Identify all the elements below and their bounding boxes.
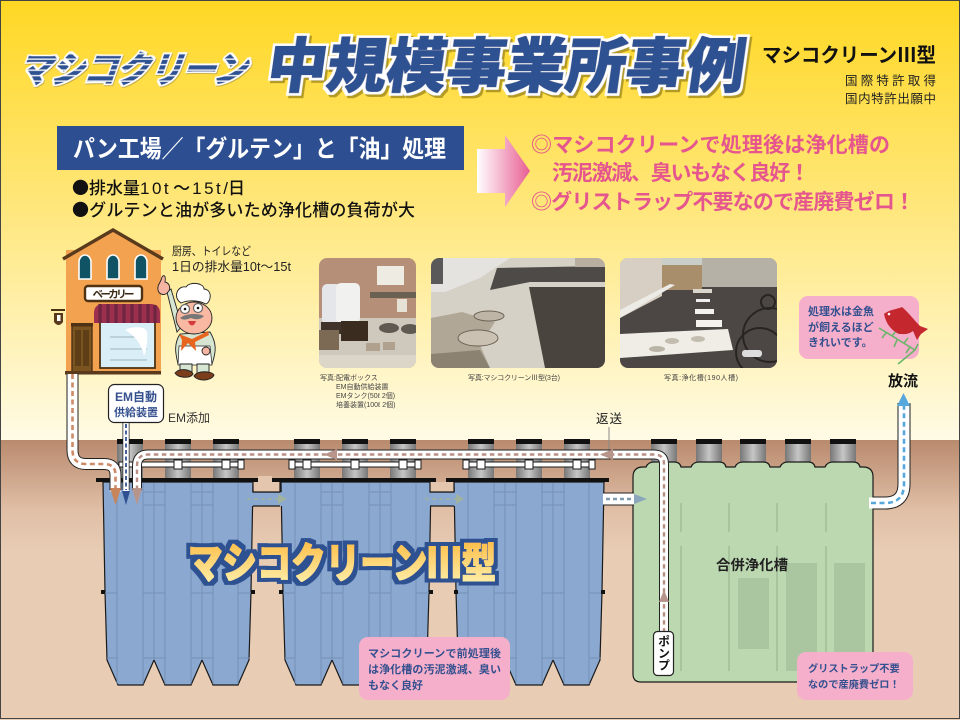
product name and patent notes: マシコクリーンⅢ型 (762, 39, 936, 68)
annotation: drain volume (172, 245, 292, 274)
callout: no grease trap (797, 652, 913, 700)
EM feeder box: 供給装置 (114, 405, 158, 419)
photo captions: EMタンク(50ℓ 2個) (336, 391, 395, 400)
callout: treated water with fish: が飼えるほど (808, 320, 874, 334)
photo: septic tank site (620, 258, 777, 368)
photo: units installed (431, 258, 605, 368)
label: EM addition: EM添加 (168, 411, 210, 425)
logo: マシコクリーン: マシコクリーン (14, 49, 257, 90)
big label: masikoclean III: マシコクリーンⅢ型 (188, 530, 496, 591)
pipe: inlet from bakery (72, 374, 121, 505)
callout: pretreatment: もなく良好 (368, 678, 423, 692)
heading bar: パン工場／「グルテン」と「油」処理 (73, 135, 446, 163)
photo captions: 写真:マシコクリーンⅢ型(3台) (468, 373, 560, 382)
tank access shafts (117, 439, 856, 478)
photo captions (320, 373, 738, 409)
photo captions: 写真:配電ボックス (320, 373, 378, 382)
EM feeder box (108, 384, 164, 422)
label: discharge: 放流 (888, 372, 918, 390)
heading bar (57, 126, 464, 170)
pink result text: ◎グリストラップ不要なので産廃費ゼロ！ (531, 190, 915, 214)
photo: EM equipment (319, 258, 419, 368)
ground (0, 440, 960, 720)
callout: pretreatment: マシコクリーンで前処理後 (368, 646, 501, 660)
callout: treated water with fish (799, 296, 928, 364)
pink result text (531, 134, 915, 214)
septic tank (green): 合併浄化槽 (716, 556, 788, 574)
bullet points: ●排水量10t～15t/日 (72, 174, 245, 199)
septic tank (green) (633, 462, 873, 682)
icon: plant (879, 328, 918, 364)
pump label (654, 632, 674, 676)
chef character (158, 276, 215, 380)
callout: pretreatment: は浄化槽の汚泥激減、臭い (368, 662, 501, 676)
callout: treated water with fish: きれいです。 (808, 336, 873, 349)
bullet points (72, 174, 415, 221)
bakery building: ベーカリー (92, 288, 134, 300)
product name and patent notes (762, 39, 936, 106)
callout: no grease trap: なので産廃費ゼロ！ (808, 678, 900, 691)
pink result text: 汚泥激減、臭いもなく良好！ (552, 161, 810, 185)
bullet points: ●グルテンと油が多いため浄化槽の負荷が大 (72, 196, 415, 221)
arrow: result (477, 135, 530, 207)
product name and patent notes: 国際特許取得 (845, 73, 936, 88)
pipe: treated water discharge (869, 393, 910, 503)
small air pipes with valves (119, 460, 595, 469)
annotation: drain volume: 1日の排水量10t～15t (172, 260, 292, 274)
EM feeder box: EM自動 (115, 389, 157, 404)
photo captions: 写真:浄化槽(190人槽) (664, 373, 738, 382)
product name and patent notes: 国内特許出願中 (845, 91, 936, 106)
title: 中規模事業所事例 (263, 33, 751, 100)
photo captions: EM自動供給装置 (336, 382, 388, 391)
pipe: return line (132, 449, 669, 632)
callout: pretreatment (359, 637, 510, 700)
annotation: drain volume: 厨房、トイレなど (172, 245, 251, 258)
label: return flow: 返送 (596, 411, 622, 426)
pink result text: ◎マシコクリーンで処理後は浄化槽の (531, 134, 890, 157)
masikoclean tanks (96, 476, 609, 685)
photo captions: 培養装置(100ℓ 2個) (336, 400, 395, 409)
bakery building (51, 230, 163, 374)
pipe: EM feed (122, 422, 130, 505)
callout: treated water with fish: 処理水は金魚 (808, 304, 874, 318)
background sky (0, 0, 960, 442)
label: return flow (596, 411, 622, 452)
callout: no grease trap: グリストラップ不要 (808, 662, 900, 675)
pump label: ポンプ (656, 635, 670, 671)
pipe: outlet to septic tank (603, 493, 647, 505)
icon: goldfish (884, 307, 928, 340)
